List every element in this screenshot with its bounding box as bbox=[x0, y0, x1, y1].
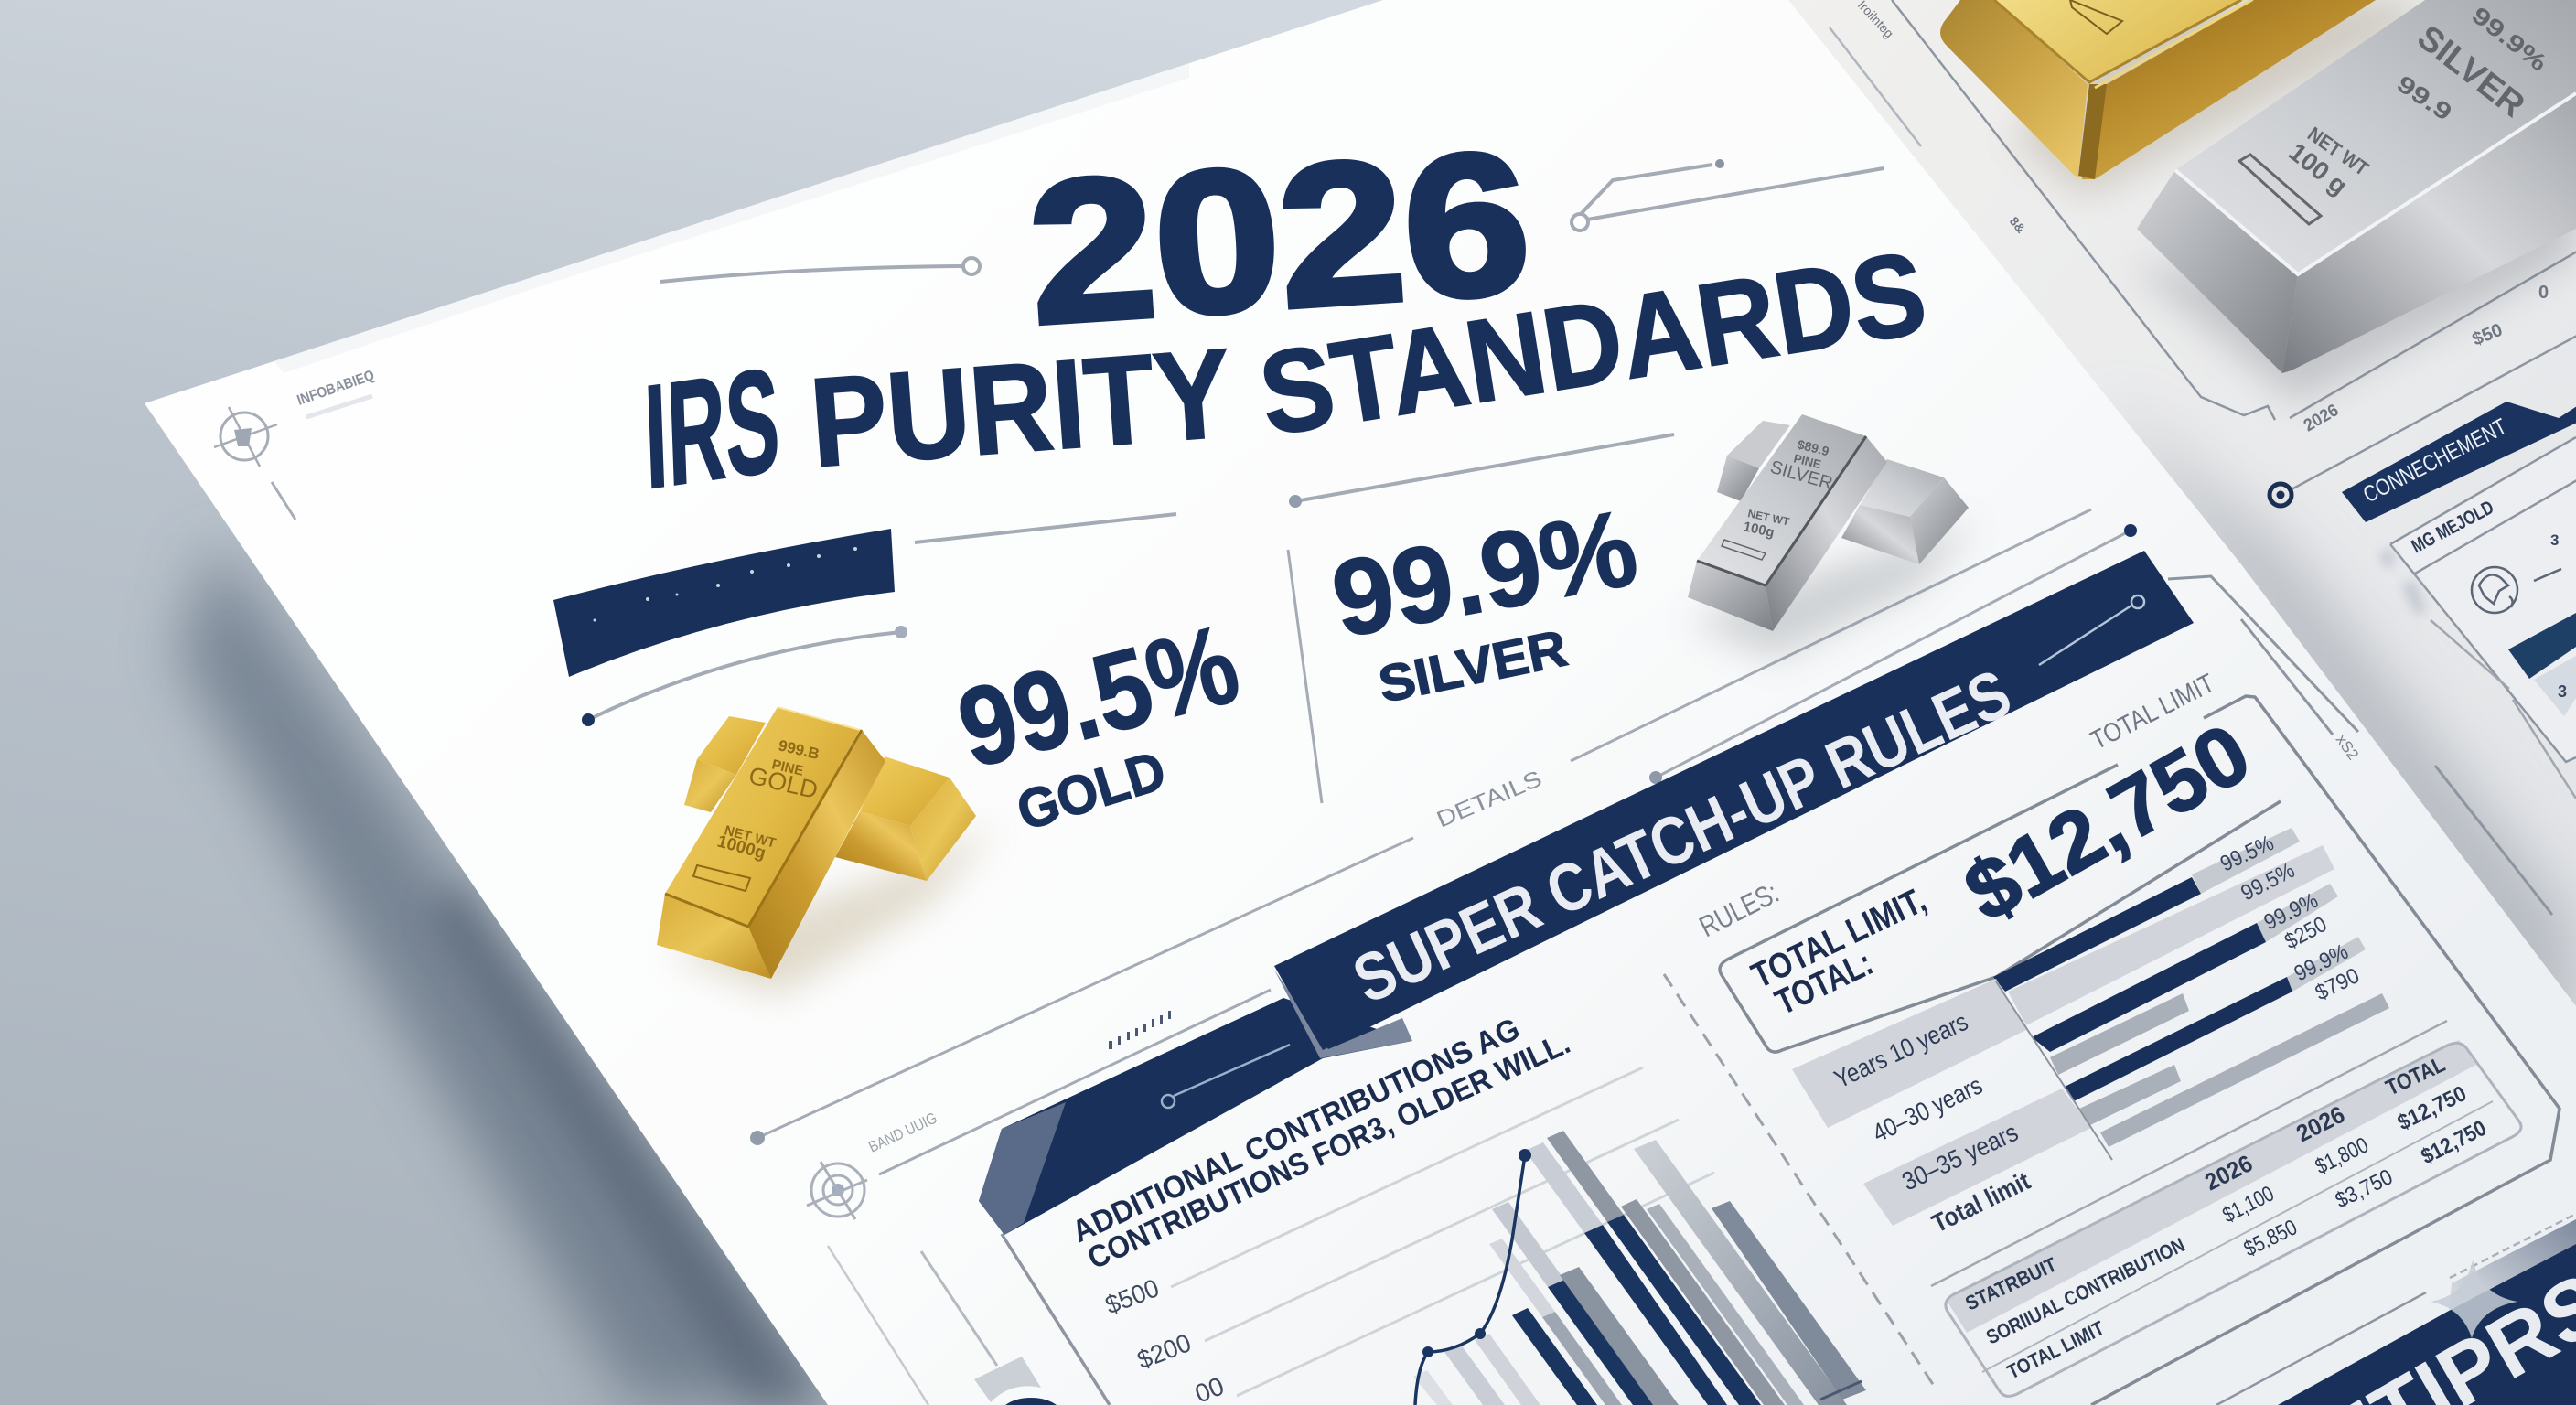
icon: silver bars bbox=[1688, 414, 1976, 659]
vertical callout marker bbox=[974, 1357, 1057, 1405]
near-edge paper shadow bbox=[430, 878, 828, 1405]
banner label: CONNECHEMENT bbox=[2359, 413, 2511, 508]
grid lines bbox=[1171, 1067, 1714, 1396]
banner text: SUPER CATCH-UP RULES bbox=[1342, 655, 2022, 1018]
bar value labels: $790 bbox=[2312, 963, 2364, 1005]
panel: total limit bbox=[1694, 669, 2560, 1405]
panel frame bbox=[1720, 696, 2560, 1405]
stat: silver bbox=[1324, 487, 1646, 713]
label SILVER: SILVER bbox=[1374, 618, 1572, 713]
panel table row bbox=[2508, 531, 2576, 716]
table labels: $1,800 bbox=[2312, 1132, 2372, 1179]
table labels: $5,850 bbox=[2240, 1215, 2301, 1261]
engraving bbox=[693, 736, 821, 891]
summary table bbox=[1931, 1021, 2521, 1396]
engraving: 999.B bbox=[777, 736, 821, 763]
engraving: 1000g bbox=[715, 832, 767, 863]
ribbon: navy label bbox=[553, 529, 895, 677]
table labels: SORIIUAL CONTRIBUTION bbox=[1982, 1233, 2188, 1348]
bar engraving: NET WT bbox=[2303, 123, 2373, 180]
engraving bbox=[1722, 436, 1835, 560]
table labels: $3,750 bbox=[2332, 1164, 2397, 1213]
small label TOTAL LIMIT: TOTAL LIMIT bbox=[2087, 669, 2219, 756]
engraving: $89.9 bbox=[1796, 436, 1830, 458]
table labels: STATRBUIT bbox=[1962, 1252, 2061, 1315]
icon: target left bbox=[807, 1162, 867, 1219]
panel table row: 3 bbox=[2550, 531, 2559, 549]
small label: mirrored caption: BAND UUIG bbox=[866, 1110, 939, 1156]
axis labels: $500 bbox=[1101, 1273, 1163, 1320]
decorative connector lines bbox=[582, 159, 2358, 1405]
small label RULES: RULES: bbox=[1694, 875, 1784, 943]
small label: DETAILS: DETAILS bbox=[1433, 766, 1546, 833]
horizontal bars bbox=[1993, 828, 2389, 1147]
panel heading: MG MEJOLD bbox=[2409, 497, 2497, 557]
table labels: TOTAL LIMIT bbox=[2003, 1316, 2109, 1383]
value 99.5%: 99.5% bbox=[947, 601, 1250, 791]
label GOLD: GOLD bbox=[1010, 739, 1173, 842]
chart heading: CONTRIBUTIONS FOR3, OLDER WILL. bbox=[1083, 1025, 1575, 1276]
arrow label: xS2 bbox=[2333, 731, 2362, 763]
table labels: $12,750 bbox=[2394, 1081, 2471, 1135]
banner main bbox=[1274, 551, 2194, 1050]
box heading bbox=[1745, 880, 1932, 1023]
icon: target bbox=[2270, 484, 2292, 506]
icon: globe bbox=[2472, 567, 2561, 613]
bar chart bbox=[1413, 1131, 1866, 1405]
box heading: TOTAL: bbox=[1769, 943, 1879, 1023]
bar value labels: 99.9% bbox=[2260, 888, 2322, 935]
big value: $12,750 bbox=[1950, 706, 2265, 939]
panel table row: 3 bbox=[2558, 682, 2567, 701]
bar value labels bbox=[2216, 831, 2364, 1005]
section banner: SUPER CATCH-UP RULES bbox=[979, 551, 2194, 1235]
age rows: 40–30 years bbox=[1868, 1071, 1987, 1147]
axis labels: $50 bbox=[2470, 320, 2506, 350]
value 99.9%: 99.9% bbox=[1324, 487, 1646, 661]
bar engraving: 99.9 bbox=[2392, 70, 2457, 126]
bar engraving: 99.9% bbox=[2466, 1, 2552, 77]
axis labels bbox=[1855, 0, 2549, 435]
title: IRS PURITY STANDARDS: PURITY bbox=[806, 323, 1236, 494]
bar value labels: 99.9% bbox=[2291, 939, 2352, 986]
star accent bbox=[2431, 1260, 2517, 1338]
table labels: 2026 bbox=[2200, 1149, 2257, 1196]
engraving: SILVER bbox=[1768, 457, 1835, 494]
title: 2026: 2026 bbox=[1023, 109, 1536, 366]
panel frame bbox=[1002, 1234, 1110, 1405]
right paper shadow bbox=[2104, 402, 2576, 1098]
engraving: NET WT bbox=[723, 822, 778, 852]
age rows: Total limit bbox=[1927, 1166, 2034, 1238]
bar value labels: 99.5% bbox=[2237, 858, 2299, 906]
bottom-right banner bbox=[2216, 1214, 2576, 1405]
table labels: 2026 bbox=[2292, 1100, 2349, 1147]
second sheet: connection panel bbox=[1830, 0, 2576, 915]
axis labels: 8& bbox=[2007, 214, 2028, 236]
table labels: TOTAL bbox=[2382, 1052, 2449, 1100]
paper shadow bbox=[178, 540, 828, 1405]
thin guide lines bbox=[1830, 0, 2576, 915]
big silver bar bbox=[2131, 0, 2576, 402]
chart heading: ADDITIONAL CONTRIBUTIONS AG bbox=[1067, 1012, 1525, 1249]
age rows: Years 10 years bbox=[1830, 1007, 1972, 1093]
stamp bbox=[2070, 0, 2122, 34]
bar engraving: SILVER bbox=[2410, 18, 2531, 125]
title: IRS PURITY STANDARDS: IRS bbox=[642, 337, 782, 520]
trend line bbox=[1415, 1149, 1531, 1405]
logo mark: top-left bbox=[214, 368, 377, 520]
engraving: PINE bbox=[770, 756, 805, 779]
chart panel bbox=[1002, 1012, 1866, 1405]
bar value labels: $250 bbox=[2281, 912, 2331, 954]
engraving: NET WT bbox=[1746, 507, 1791, 529]
title: IRS PURITY STANDARDS: STANDARDS bbox=[1251, 227, 1934, 461]
table labels bbox=[1962, 1052, 2490, 1383]
connection banner bbox=[2342, 402, 2576, 522]
box heading: TOTAL LIMIT, bbox=[1745, 880, 1932, 996]
title: IRS PURITY STANDARDS bbox=[642, 227, 1934, 520]
big gold bar bbox=[1940, 0, 2415, 197]
table labels: $12,750 bbox=[2417, 1116, 2490, 1169]
banner tail bbox=[979, 998, 1412, 1235]
axis labels: 2026 bbox=[2301, 401, 2342, 435]
right desk sheet bbox=[1555, 0, 2576, 1405]
axis labels: 0 bbox=[2538, 283, 2549, 303]
age rows bbox=[1792, 979, 2112, 1238]
age rows: 30–35 years bbox=[1897, 1118, 2023, 1196]
axis labels bbox=[1101, 1273, 1228, 1405]
small ticks bbox=[1109, 1011, 1171, 1049]
bar value labels: 99.5% bbox=[2216, 831, 2278, 876]
brand text: INFOBABIEQ bbox=[295, 368, 377, 409]
engraving: PINE bbox=[1792, 451, 1823, 471]
engraving: 100g bbox=[1742, 519, 1776, 541]
dashed divider bbox=[1664, 974, 1937, 1391]
stat: gold bbox=[947, 601, 1250, 842]
smudge marks bbox=[2378, 549, 2426, 617]
axis labels: $200 bbox=[1133, 1328, 1195, 1375]
engraving: GOLD bbox=[746, 762, 821, 804]
bar engraving: 100 g bbox=[2283, 137, 2353, 200]
table labels: $1,100 bbox=[2218, 1182, 2278, 1228]
icon: gold bars bbox=[657, 707, 997, 997]
bar engraving bbox=[2239, 1, 2552, 224]
